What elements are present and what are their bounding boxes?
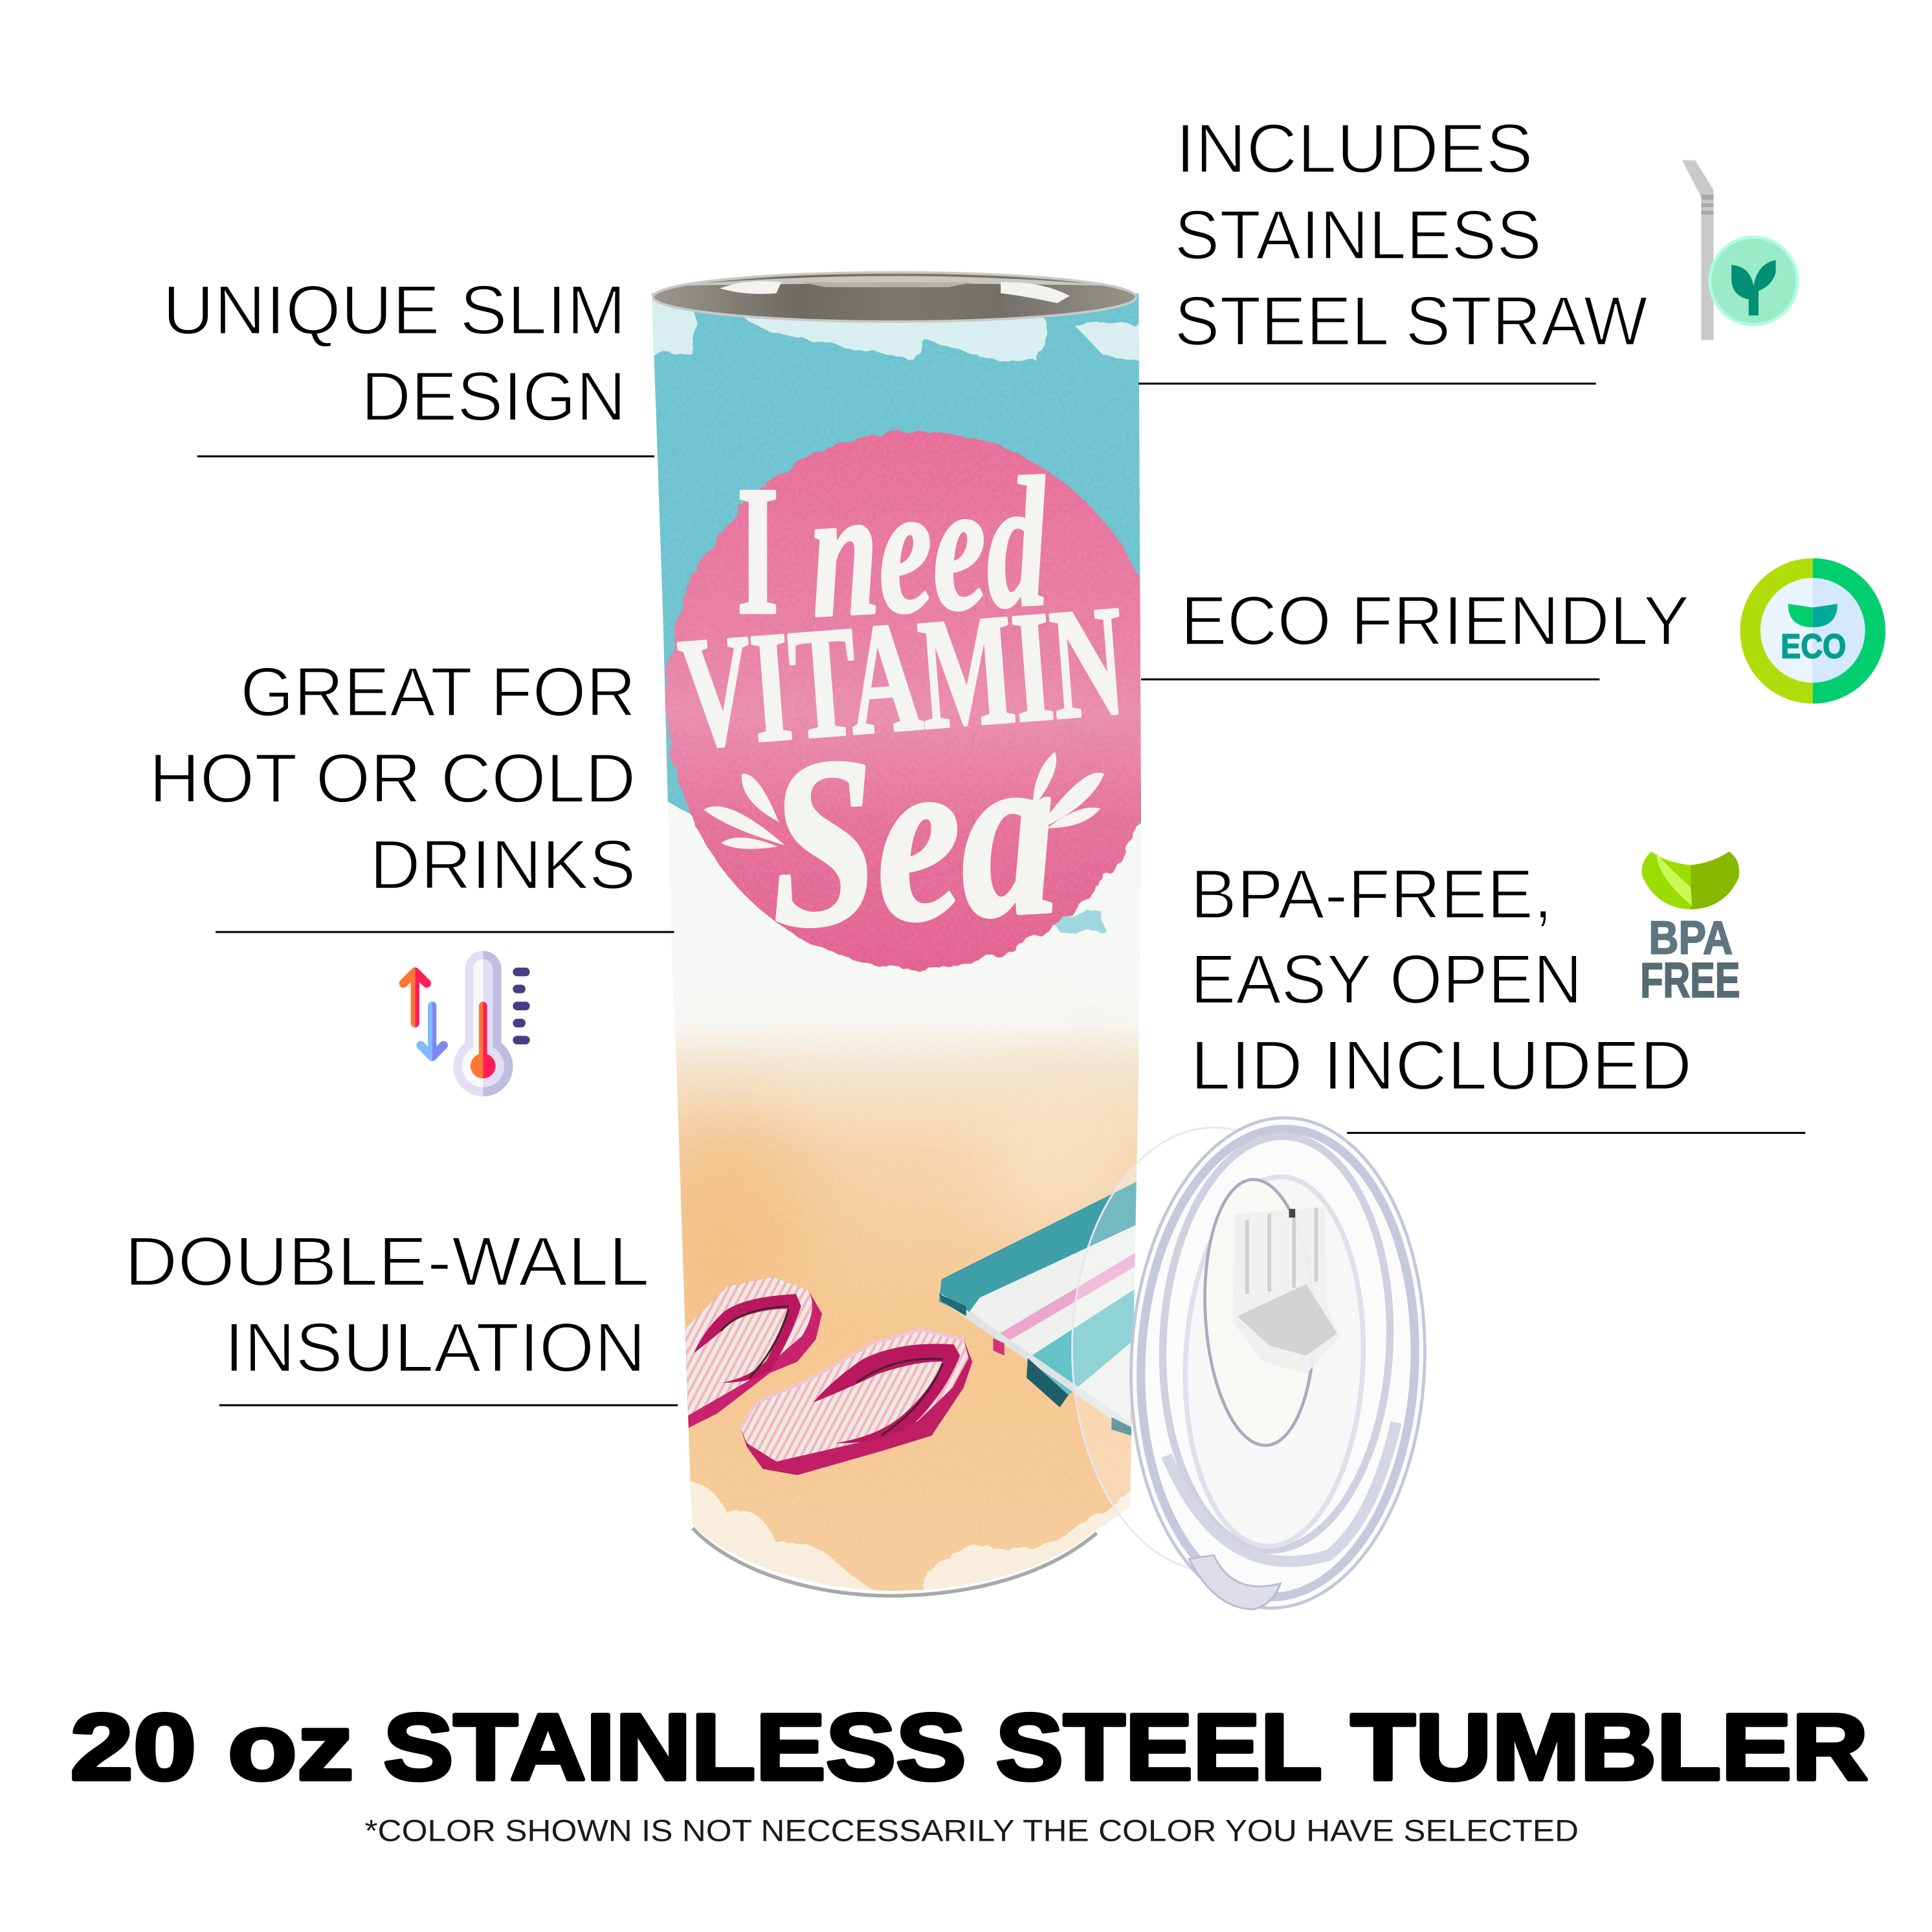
- pink watercolor circle: [667, 431, 1167, 969]
- callout: hot or cold: DRINKS: [370, 826, 636, 904]
- lid back rim: [1072, 1127, 1355, 1571]
- callout: hot or cold: HOT OR COLD: [149, 740, 636, 817]
- towel stripe pink: [1001, 1253, 1135, 1340]
- disclaimer caption: *COLOR SHOWN IS NOT NECCESSARILY THE COLOR YOU HAVE SELECTED: [365, 1814, 1579, 1849]
- callout: unique slim design: DESIGN: [361, 357, 626, 435]
- callout: bpa-free lid: EASY OPEN: [1190, 940, 1582, 1018]
- tumbler: [641, 272, 1167, 1602]
- towel: [939, 1181, 1138, 1436]
- lid drink opening: [1198, 1177, 1320, 1448]
- icon: bpa free leaves: FREE: [1640, 953, 1740, 1008]
- callout: double-wall insulation: INSULATION: [225, 1309, 646, 1386]
- flip flop right: [740, 1329, 972, 1475]
- callout: stainless steel straw: [1138, 110, 1648, 384]
- clear slider lid: [1072, 1111, 1435, 1614]
- callout: bpa-free lid: BPA-FREE,: [1190, 855, 1553, 933]
- paper grain: [641, 283, 1159, 1602]
- steel rim opening: [653, 272, 1136, 322]
- icon: eco badge: ECO: [1781, 628, 1846, 666]
- lettering: I need Vitamin Sea: [674, 439, 1130, 978]
- splash right: [1033, 751, 1104, 830]
- left strap: [694, 1294, 801, 1382]
- splash left: [704, 773, 785, 849]
- lid front: [1121, 1111, 1435, 1614]
- callout: hot or cold: [149, 653, 674, 933]
- callout: double-wall insulation: [124, 1223, 678, 1406]
- title: 20 oz: [71, 1694, 353, 1799]
- callout: eco friendly: ECO FRIENDLY: [1181, 582, 1689, 660]
- lid slider mechanism: [1232, 1208, 1340, 1374]
- icon: straw with sprout: [1682, 161, 1797, 340]
- icon: bpa free leaves: BPA: [1649, 913, 1733, 964]
- lid lip: [1189, 1555, 1280, 1610]
- icon: eco badge: [1740, 559, 1885, 704]
- towel edge: [942, 1294, 1131, 1433]
- callout: stainless steel straw: STEEL STRAW: [1175, 282, 1648, 360]
- small teal remnant: [1050, 909, 1104, 934]
- callout: unique slim design: [162, 271, 654, 458]
- callout: bpa-free lid: LID INCLUDED: [1190, 1027, 1692, 1104]
- towel stripe teal top: [939, 1181, 1138, 1316]
- flip flop left: [685, 1277, 822, 1430]
- icon: thermometer with arrows: [403, 951, 530, 1096]
- title: STAINLESS: [383, 1694, 966, 1799]
- word VITAMIN: VITAMIN: [674, 573, 1130, 781]
- torn white edge at the top: [647, 296, 1146, 362]
- word Sea: Sea: [763, 697, 1062, 978]
- tumbler base shadow: [693, 1528, 1097, 1596]
- callout: hot or cold: GREAT FOR: [240, 653, 636, 731]
- teal watercolor band: [652, 293, 1141, 826]
- title: TUMBLER: [1351, 1694, 1868, 1799]
- letter I: I: [737, 447, 779, 652]
- tumbler wrap artwork: [641, 283, 1167, 1602]
- callout: stainless steel straw: INCLUDES: [1175, 110, 1533, 188]
- label text: UNIQUE SLIM: [162, 271, 626, 349]
- title: STEEL: [995, 1694, 1322, 1799]
- sand bottom clouds: [690, 1481, 1130, 1590]
- right strap: [814, 1344, 960, 1443]
- towel stripe teal lower: [1032, 1289, 1134, 1395]
- word need: need: [805, 439, 1054, 656]
- callout: double-wall insulation: DOUBLE-WALL: [124, 1223, 649, 1300]
- title: [71, 1694, 1868, 1799]
- sand mottling: [641, 1109, 814, 1331]
- icon: bpa free leaves: [1640, 852, 1740, 1008]
- callout: bpa-free lid: [1190, 855, 1805, 1134]
- callout: stainless steel straw: STAINLESS: [1175, 196, 1542, 274]
